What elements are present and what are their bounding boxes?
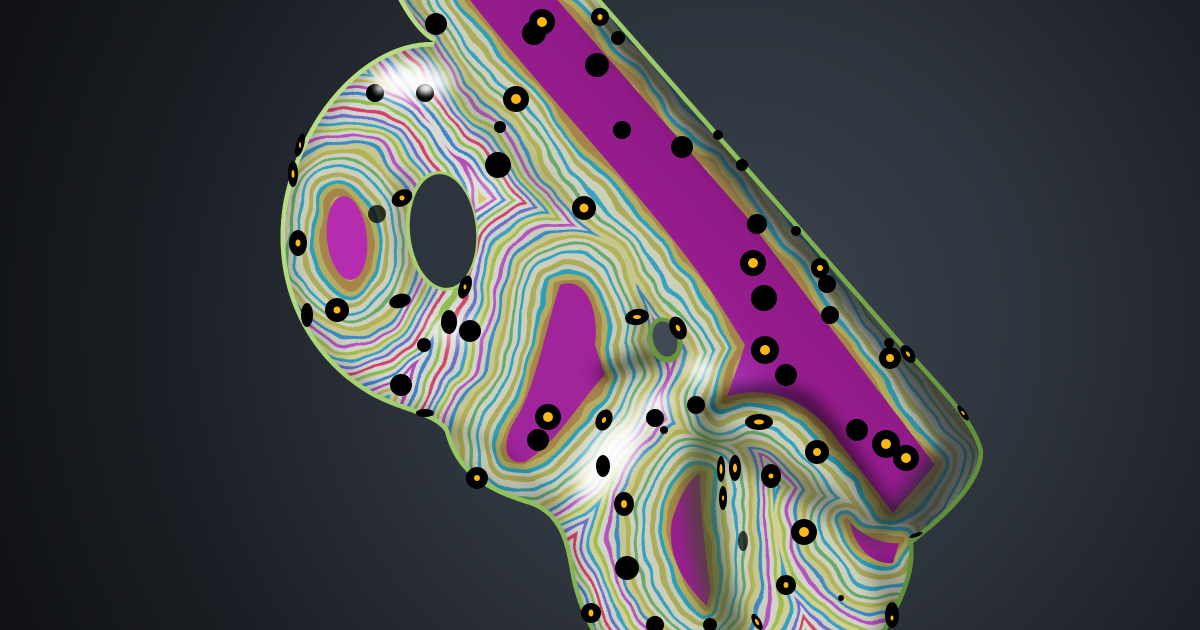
sculpture body <box>281 0 983 630</box>
glossy reflections on two dots <box>375 82 434 94</box>
small hole <box>643 313 687 367</box>
large torus hole <box>401 168 483 294</box>
green rim <box>281 0 983 630</box>
specular highlights <box>372 64 713 512</box>
yellow centres <box>292 14 965 626</box>
marbled contour bands <box>323 0 935 606</box>
shading: folds and soft shadows <box>281 0 983 630</box>
magenta pools <box>323 0 935 606</box>
black dots with yellow centres <box>288 8 971 630</box>
